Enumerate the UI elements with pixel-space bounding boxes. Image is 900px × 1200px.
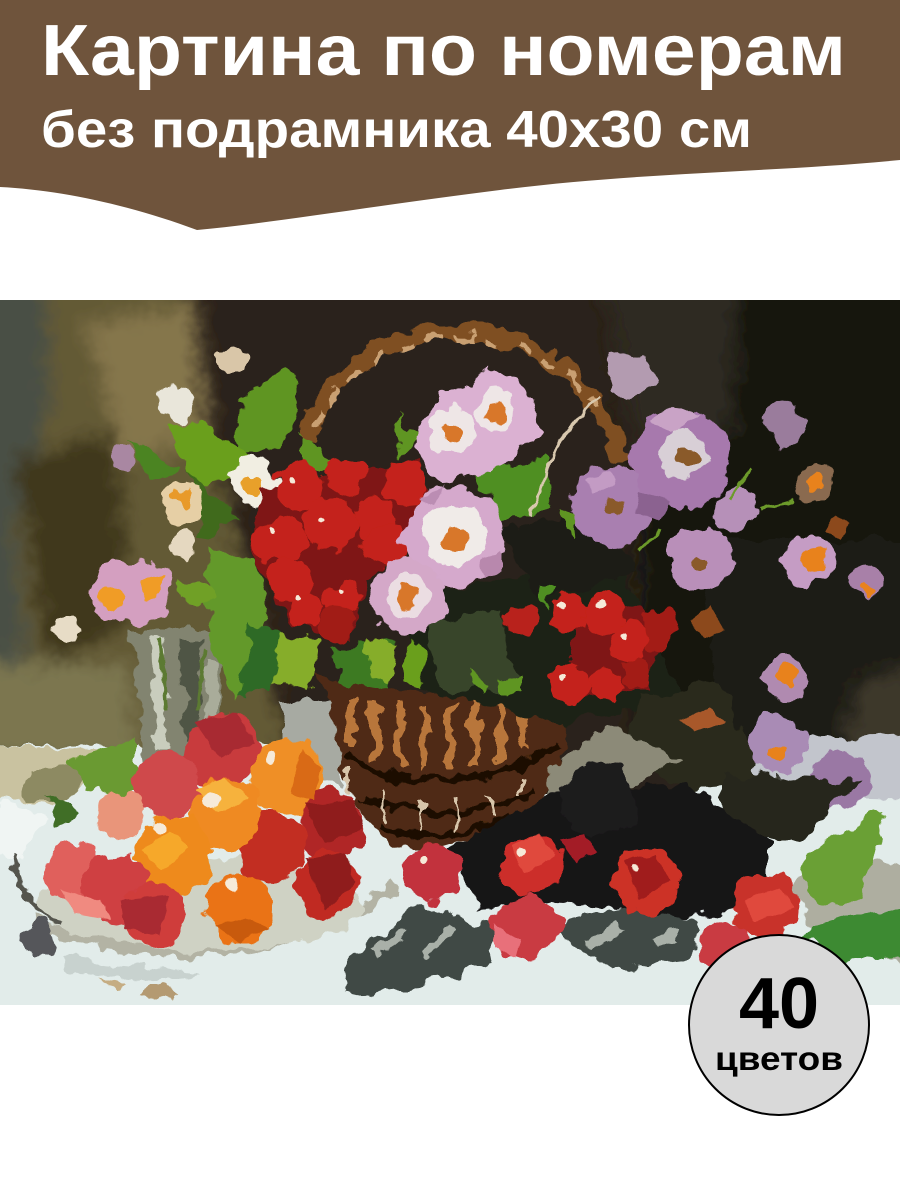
title: Картина по номерам [41, 11, 846, 91]
fruit shading [60, 714, 795, 958]
colours label: цветов [715, 1040, 843, 1077]
green leaves right [800, 812, 885, 908]
small flowers [56, 343, 277, 642]
painting background [0, 300, 900, 794]
dark twigs and leaves right side [545, 680, 860, 840]
large pink flowers [370, 351, 882, 810]
red berries [255, 455, 678, 705]
plate with apples and oranges [17, 712, 395, 955]
green foliage [45, 365, 415, 830]
flower petal tones and stems [160, 395, 850, 732]
fruit and berry highlights [154, 477, 638, 892]
dark fruit and strawberries on table [345, 762, 900, 992]
number of colours: 40 [739, 964, 819, 1044]
header banner [0, 0, 900, 230]
badge: 40 colours [689, 935, 869, 1115]
subtitle: без подрамника 40х30 см [41, 101, 752, 159]
painting: still life with basket of flowers and fruit [0, 300, 900, 1005]
paint details: shading and highlights [60, 395, 850, 958]
basket interior dark leaves and green [400, 460, 680, 722]
table cloth [0, 696, 900, 1005]
wicker basket [308, 331, 625, 848]
vase with flowers at left [45, 343, 415, 830]
